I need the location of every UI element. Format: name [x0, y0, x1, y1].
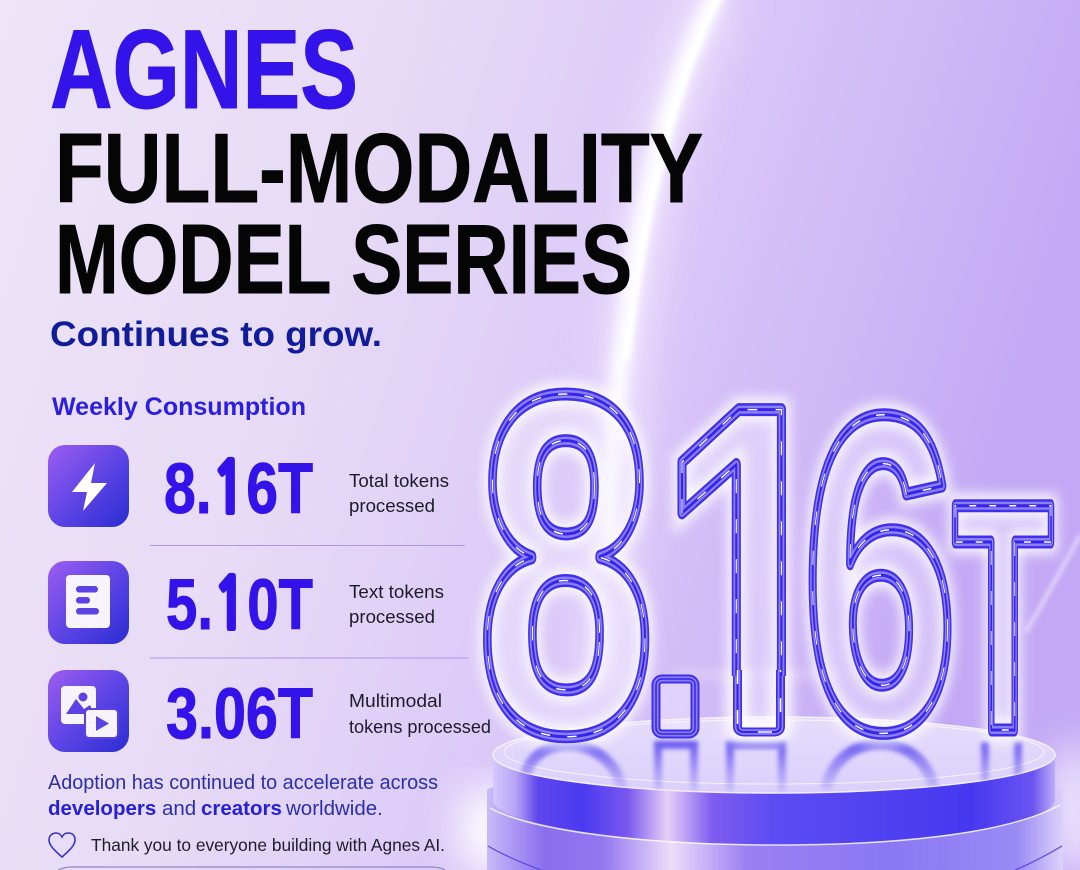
upper disc top: [493, 717, 1055, 793]
tube core: 8: [477, 294, 655, 835]
lower disc: [487, 779, 1063, 870]
glow layer: [474, 378, 1064, 754]
tube outer: [483, 388, 1054, 744]
tube core: 1: [660, 308, 842, 833]
stat: multimodal tokens: Multimodal: [349, 691, 442, 711]
tube highlight: [484, 390, 1053, 741]
adoption text: developers and: [48, 797, 196, 820]
stat: text tokens: 5.10T: [166, 566, 313, 645]
bottom button edge: [58, 867, 445, 870]
tube highlight: 8: [477, 294, 655, 835]
tube core: T: [953, 435, 1053, 800]
stat: total tokens: 8.16T: [164, 450, 313, 529]
thank you text: Thank you to everyone building with Agnes AI.: [91, 835, 445, 855]
icon: heart: [49, 833, 75, 857]
tube core: 6: [802, 323, 958, 825]
tube white flecks: [487, 393, 1052, 738]
tube white flecks: 8: [477, 294, 655, 835]
stat: total tokens: [164, 450, 449, 529]
stat: text tokens: processed: [349, 607, 435, 627]
adoption text: worldwide.: [285, 797, 383, 820]
adoption text: Adoption has continued to accelerate across: [48, 771, 438, 794]
glow layer: 8: [477, 294, 655, 835]
subtitle: Continues to grow.: [50, 315, 382, 354]
icon: image and video: [48, 670, 129, 752]
glow layer: T: [953, 435, 1053, 800]
stat: multimodal tokens: tokens processed: [349, 717, 491, 737]
digit reflections: [524, 742, 1018, 792]
title: FULL-MODALITY MODEL SERIES: FULL-MODALITY: [55, 113, 703, 223]
tube outer: T: [953, 435, 1053, 800]
title: FULL-MODALITY MODEL SERIES: [55, 113, 703, 314]
tube outer: 1: [660, 308, 842, 833]
tube white flecks: T: [953, 435, 1053, 800]
tube white flecks: 1: [660, 308, 842, 833]
glow layer: 1: [660, 308, 842, 833]
tube highlight: 1: [660, 308, 842, 833]
tube white flecks: 6: [802, 323, 958, 825]
stat: total tokens: processed: [349, 496, 435, 516]
stat: text tokens: [166, 566, 444, 645]
title: AGNES: AGNES: [50, 7, 358, 132]
title: FULL-MODALITY MODEL SERIES: MODEL SERIES: [55, 204, 632, 314]
tube outer: 8: [477, 294, 655, 835]
tube highlight: 6: [802, 323, 958, 825]
icon: lightning bolt: [48, 445, 129, 527]
big 3D number 8.16T: [474, 378, 1064, 754]
adoption text: creators: [201, 797, 282, 820]
podium: [487, 717, 1063, 870]
stat: multimodal tokens: [166, 675, 491, 754]
adoption text: [48, 771, 438, 820]
tube core: [486, 392, 1052, 738]
upper disc side: [493, 757, 1055, 845]
glow layer: 6: [802, 323, 958, 825]
tube outer: 6: [802, 323, 958, 825]
icon: document: [48, 561, 129, 644]
tube highlight: T: [953, 435, 1053, 800]
stat: multimodal tokens: 3.06T: [166, 675, 313, 754]
heading: weekly consumption: Weekly Consumption: [52, 393, 306, 421]
stat: text tokens: Text tokens: [349, 582, 444, 602]
stat: total tokens: Total tokens: [349, 471, 449, 491]
decimal point: [656, 679, 695, 734]
